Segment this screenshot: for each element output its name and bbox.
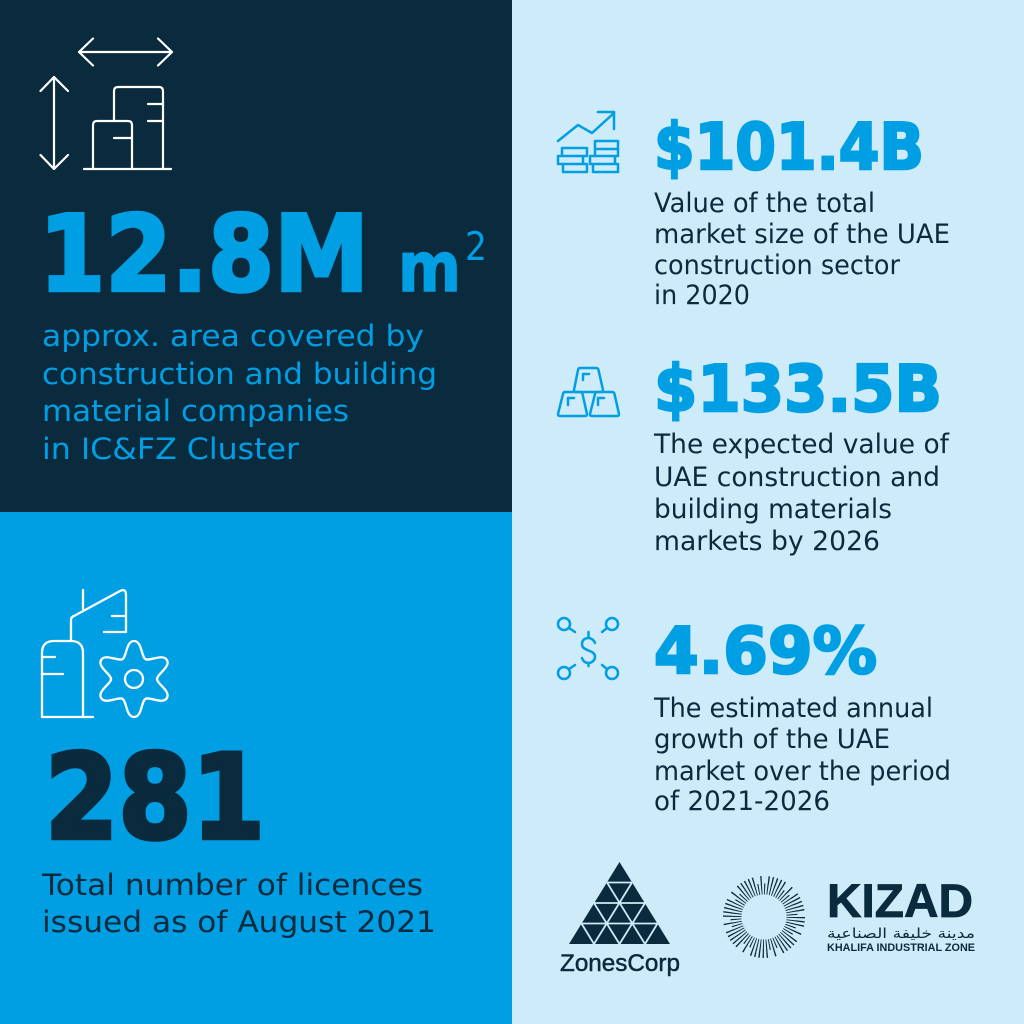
text: market size description <box>654 188 950 311</box>
text: licences description <box>41 868 436 939</box>
icon: factory buildings and gear <box>42 590 173 717</box>
text: area description <box>42 319 437 466</box>
text: licences description: Total number of licences <box>41 868 423 902</box>
stat: 12.8M m2: 2 <box>465 225 487 270</box>
icon: buildings with dimension arrows <box>40 38 172 169</box>
logo: KIZAD: مدينة خليفة الصناعية <box>827 926 975 942</box>
text: area description: material companies <box>42 394 349 428</box>
logo: ZonesCorp: ZonesCorp <box>560 950 680 977</box>
logo: KIZAD: KHALIFA INDUSTRIAL ZONE <box>827 942 975 954</box>
text: growth description: of 2021-2026 <box>654 786 830 817</box>
text: market size description: market size of the UAE <box>654 219 950 250</box>
stat: $101.4B: $101.4B <box>654 111 924 185</box>
stat: 12.8M m2: m <box>398 228 461 308</box>
text: materials market description: markets by 2026 <box>654 526 880 557</box>
text: materials market description: building materials <box>654 494 892 525</box>
icon: KIZAD sunburst <box>727 880 801 954</box>
logo: KIZAD <box>727 874 975 954</box>
text: area description: construction and building <box>42 357 437 391</box>
icon: dollar with nodes <box>558 618 618 679</box>
text: market size description: in 2020 <box>654 280 750 311</box>
text: growth description: market over the period <box>654 756 951 787</box>
logo: ZonesCorp <box>560 862 680 977</box>
stat: 4.69%: 4.69% <box>654 615 877 689</box>
text: area description: in IC&FZ Cluster <box>42 432 299 466</box>
stat: 281: 281 <box>45 729 265 866</box>
text: market size description: Value of the total <box>654 188 875 219</box>
stat: $133.5B: $133.5B <box>654 353 942 427</box>
text: licences description: issued as of August 2021 <box>42 905 436 939</box>
text: growth description: growth of the UAE <box>654 724 890 755</box>
icon: stacked gold bars <box>558 368 619 416</box>
text: area description: approx. area covered by <box>42 319 424 353</box>
text: growth description: The estimated annual <box>653 693 933 724</box>
logo: KIZAD: KIZAD <box>827 874 973 927</box>
text: growth description <box>653 693 951 817</box>
text: materials market description: The expected value of <box>653 429 950 460</box>
text: market size description: construction sector <box>654 250 901 281</box>
panel: market stats <box>512 0 1024 1024</box>
text: materials market description <box>653 429 950 557</box>
panel: licences <box>0 512 512 1024</box>
stat: 12.8M m2: 12.8M <box>39 194 369 316</box>
text: materials market description: UAE construction and <box>654 462 940 493</box>
icon: rising chart with coins <box>558 112 618 172</box>
panel: area covered <box>0 0 512 512</box>
